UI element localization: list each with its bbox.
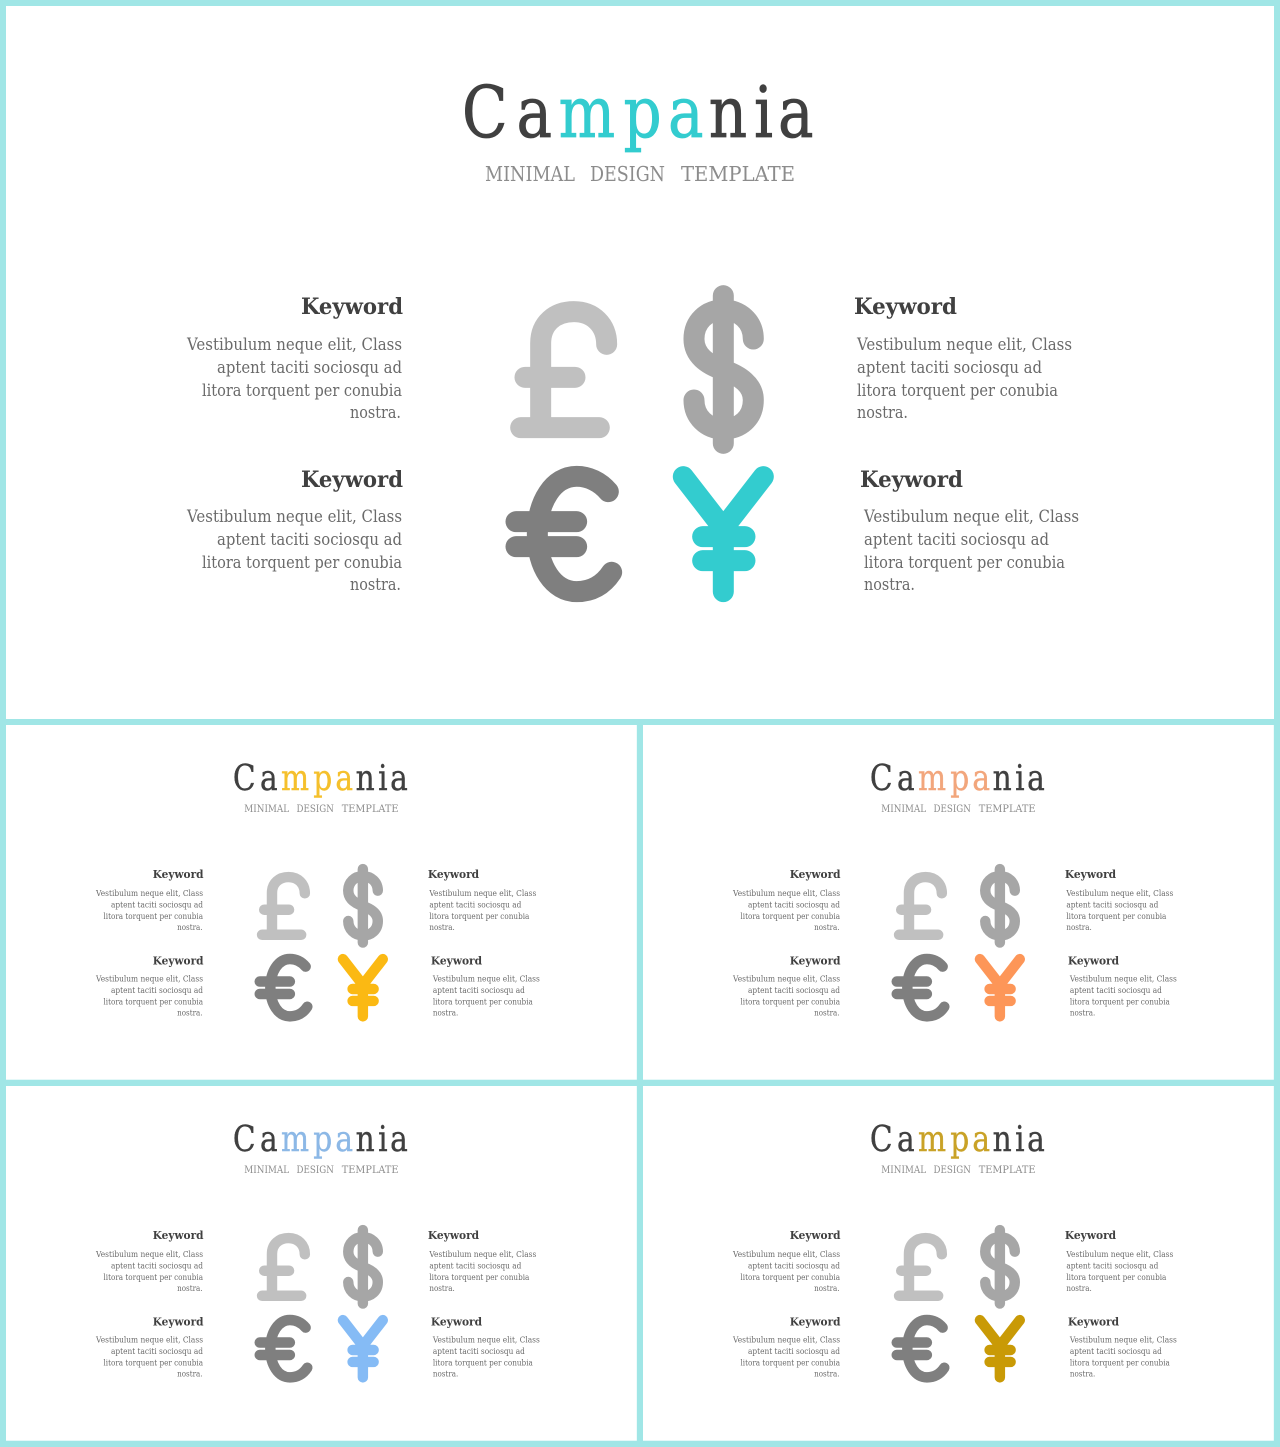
icon: dollar	[348, 869, 378, 943]
subtitle	[485, 162, 795, 186]
text block: top right: Keyword	[428, 1229, 479, 1242]
icon: dollar	[985, 869, 1015, 943]
text block: bottom left: Keyword	[153, 1315, 204, 1328]
title: mpa	[559, 72, 704, 154]
text block: top right: nostra.	[1066, 922, 1092, 932]
text block: top right: nostra.	[429, 1283, 455, 1293]
text block: top right	[1065, 1229, 1173, 1293]
text block: bottom right: nostra.	[864, 575, 915, 595]
text block: bottom right: nostra.	[433, 1008, 458, 1018]
icon: euro	[897, 959, 944, 1016]
text block: top right: Vestibulum neque elit, Class	[428, 888, 536, 898]
text block: top right: Keyword	[428, 868, 479, 881]
text block: bottom left	[186, 467, 403, 595]
text block: top right	[428, 868, 536, 932]
subtitle	[244, 1165, 399, 1176]
subtitle: TEMPLATE	[979, 804, 1036, 815]
text block: bottom right: Keyword	[431, 1315, 482, 1328]
text block: top right: aptent taciti sociosqu ad	[429, 1261, 522, 1271]
text block: bottom right	[860, 467, 1079, 595]
text block: bottom left: litora torquent per conubia	[104, 997, 203, 1007]
text block: bottom left: nostra.	[350, 575, 401, 595]
text block: bottom left: nostra.	[814, 1008, 840, 1018]
title: mpa	[281, 758, 353, 799]
subtitle	[244, 804, 399, 815]
title: nia	[993, 758, 1045, 799]
text block: top left	[186, 294, 403, 423]
icon: yen	[980, 1320, 1020, 1377]
icon: dollar	[694, 296, 753, 443]
text block: bottom right	[431, 1315, 540, 1379]
subtitle: DESIGN	[297, 1165, 334, 1176]
subtitle: MINIMAL	[881, 804, 926, 815]
text block: bottom left: litora torquent per conubia	[202, 553, 402, 573]
text block: bottom left	[732, 1315, 841, 1379]
text block: top left: aptent taciti sociosqu ad	[217, 358, 402, 378]
text block: bottom right: aptent taciti sociosqu ad	[1070, 985, 1162, 995]
panel: yellow variant slide	[6, 725, 637, 1080]
title	[233, 758, 408, 799]
text block: bottom right: Vestibulum neque elit, Class	[1069, 974, 1177, 984]
title: Ca	[462, 72, 552, 154]
icon: pound	[262, 877, 305, 935]
text block: top right: nostra.	[1066, 1283, 1092, 1293]
text block: bottom right: Vestibulum neque elit, Class	[1069, 1335, 1177, 1345]
text block: top right: Vestibulum neque elit, Class	[1065, 888, 1173, 898]
text block: top right: litora torquent per conubia	[1066, 911, 1166, 921]
title: Ca	[870, 1119, 915, 1160]
text block: top left: nostra.	[814, 922, 840, 932]
text block: bottom right: litora torquent per conubia	[433, 997, 533, 1007]
title: mpa	[918, 758, 990, 799]
text block: bottom right: nostra.	[1070, 1008, 1095, 1018]
panel: main slide	[6, 6, 1274, 719]
title	[233, 1119, 408, 1160]
text block: bottom right	[431, 954, 540, 1018]
text block: top left: nostra.	[350, 403, 401, 423]
text block: bottom left: Keyword	[790, 1315, 841, 1328]
text block: top left: litora torquent per conubia	[741, 911, 840, 921]
text block: bottom left: Keyword	[153, 954, 204, 967]
title	[870, 1119, 1045, 1160]
text block: bottom left: nostra.	[177, 1369, 203, 1379]
text block: top left	[95, 868, 204, 932]
icon: yen	[343, 1320, 383, 1377]
icon: yen	[343, 959, 383, 1016]
subtitle: DESIGN	[934, 1165, 971, 1176]
icon: euro	[260, 1320, 307, 1377]
text block: top left: Keyword	[153, 1229, 204, 1242]
text block: top right: litora torquent per conubia	[429, 911, 529, 921]
text block: top left: Vestibulum neque elit, Class	[186, 335, 402, 355]
text block: top right: aptent taciti sociosqu ad	[857, 358, 1042, 378]
text block: bottom right: litora torquent per conubia	[1070, 1358, 1170, 1368]
text block: bottom left: litora torquent per conubia	[741, 997, 840, 1007]
text block: bottom left: Vestibulum neque elit, Class	[732, 974, 840, 984]
subtitle	[881, 1165, 1036, 1176]
text block: top right: nostra.	[429, 922, 455, 932]
text block: top left: aptent taciti sociosqu ad	[111, 1261, 204, 1271]
text block: bottom left: Vestibulum neque elit, Class	[186, 507, 402, 527]
title: nia	[356, 758, 408, 799]
text block: bottom right: nostra.	[433, 1369, 458, 1379]
text block: top left: Keyword	[153, 868, 204, 881]
text block: top left: Vestibulum neque elit, Class	[732, 1249, 840, 1259]
subtitle: TEMPLATE	[342, 1165, 399, 1176]
text block: top right: litora torquent per conubia	[857, 381, 1058, 401]
subtitle	[881, 804, 1036, 815]
text block: top left: litora torquent per conubia	[104, 911, 203, 921]
subtitle: TEMPLATE	[681, 162, 795, 186]
text block: top left: aptent taciti sociosqu ad	[748, 900, 841, 910]
text block: bottom right: litora torquent per conubia	[864, 553, 1065, 573]
text block: top left: litora torquent per conubia	[104, 1272, 203, 1282]
title	[870, 758, 1045, 799]
text block: top right: Keyword	[1065, 1229, 1116, 1242]
text block: top left: Vestibulum neque elit, Class	[95, 1249, 203, 1259]
text block: bottom right: Keyword	[431, 954, 482, 967]
icon: euro	[516, 476, 612, 592]
text block: top left	[732, 1229, 841, 1293]
text block: bottom left	[732, 954, 841, 1018]
title: nia	[709, 72, 814, 154]
icon: pound	[899, 1238, 942, 1296]
text block: top left: Keyword	[301, 294, 403, 320]
text block: top left	[732, 868, 841, 932]
text block: bottom right: Vestibulum neque elit, Class	[432, 974, 540, 984]
panel: gold variant slide	[643, 1086, 1274, 1441]
text block: bottom left: aptent taciti sociosqu ad	[748, 1346, 841, 1356]
text block: bottom left: Keyword	[301, 467, 403, 493]
subtitle: MINIMAL	[485, 162, 575, 186]
text block: bottom right: Keyword	[1068, 1315, 1119, 1328]
icon: dollar	[985, 1230, 1015, 1304]
text block: bottom left	[95, 1315, 204, 1379]
icon: yen	[683, 477, 763, 592]
icon: pound	[521, 312, 607, 428]
text block: bottom right	[1068, 954, 1177, 1018]
text block: bottom right: Keyword	[1068, 954, 1119, 967]
icon: pound	[262, 1238, 305, 1296]
text block: bottom right: aptent taciti sociosqu ad	[1070, 1346, 1162, 1356]
text block: bottom left: litora torquent per conubia	[104, 1358, 203, 1368]
text block: bottom left: aptent taciti sociosqu ad	[748, 985, 841, 995]
icon: euro	[897, 1320, 944, 1377]
text block: top left	[95, 1229, 204, 1293]
subtitle: MINIMAL	[244, 804, 289, 815]
text block: top right: litora torquent per conubia	[1066, 1272, 1166, 1282]
text block: top left: Vestibulum neque elit, Class	[732, 888, 840, 898]
text block: bottom right: nostra.	[1070, 1369, 1095, 1379]
title: nia	[993, 1119, 1045, 1160]
text block: bottom right: aptent taciti sociosqu ad	[433, 985, 525, 995]
text block: bottom left: aptent taciti sociosqu ad	[111, 985, 204, 995]
title	[462, 72, 814, 154]
text block: top left: nostra.	[177, 922, 203, 932]
text block: bottom left: aptent taciti sociosqu ad	[217, 530, 402, 550]
text block: top left: nostra.	[177, 1283, 203, 1293]
text block: top right: aptent taciti sociosqu ad	[1066, 900, 1159, 910]
subtitle: DESIGN	[934, 804, 971, 815]
text block: top right	[854, 294, 1072, 423]
text block: top left: litora torquent per conubia	[202, 381, 402, 401]
text block: bottom left: nostra.	[177, 1008, 203, 1018]
panel: orange variant slide	[643, 725, 1274, 1080]
text block: bottom right: Vestibulum neque elit, Class	[432, 1335, 540, 1345]
text block: top right: Keyword	[1065, 868, 1116, 881]
title: mpa	[281, 1119, 353, 1160]
title: Ca	[233, 758, 278, 799]
subtitle: DESIGN	[590, 162, 665, 186]
subtitle: MINIMAL	[244, 1165, 289, 1176]
text block: top right: aptent taciti sociosqu ad	[429, 900, 522, 910]
title: mpa	[918, 1119, 990, 1160]
text block: top right: Keyword	[854, 294, 957, 320]
text block: top left: aptent taciti sociosqu ad	[111, 900, 204, 910]
text block: bottom left	[95, 954, 204, 1018]
text block: top left: Keyword	[790, 868, 841, 881]
text block: top left: Vestibulum neque elit, Class	[95, 888, 203, 898]
text block: bottom left: Keyword	[790, 954, 841, 967]
icon: pound	[899, 877, 942, 935]
subtitle: MINIMAL	[881, 1165, 926, 1176]
subtitle: TEMPLATE	[342, 804, 399, 815]
text block: bottom right: Keyword	[860, 467, 963, 493]
text block: bottom left: Vestibulum neque elit, Class	[95, 1335, 203, 1345]
text block: top right	[428, 1229, 536, 1293]
text block: top right: nostra.	[857, 403, 908, 423]
text block: bottom left: Vestibulum neque elit, Class	[732, 1335, 840, 1345]
text block: bottom right: litora torquent per conubia	[433, 1358, 533, 1368]
text block: bottom left: aptent taciti sociosqu ad	[111, 1346, 204, 1356]
text block: bottom right: litora torquent per conubia	[1070, 997, 1170, 1007]
title: Ca	[870, 758, 915, 799]
text block: top right: Vestibulum neque elit, Class	[428, 1249, 536, 1259]
text block: top right: litora torquent per conubia	[429, 1272, 529, 1282]
title: nia	[356, 1119, 408, 1160]
text block: top left: Keyword	[790, 1229, 841, 1242]
text block: bottom left: Vestibulum neque elit, Class	[95, 974, 203, 984]
text block: top left: litora torquent per conubia	[741, 1272, 840, 1282]
text block: bottom right: aptent taciti sociosqu ad	[433, 1346, 525, 1356]
text block: top left: nostra.	[814, 1283, 840, 1293]
text block: bottom right: aptent taciti sociosqu ad	[864, 530, 1049, 550]
icon: dollar	[348, 1230, 378, 1304]
subtitle: TEMPLATE	[979, 1165, 1036, 1176]
icon: euro	[260, 959, 307, 1016]
icon: yen	[980, 959, 1020, 1016]
text block: bottom left: nostra.	[814, 1369, 840, 1379]
text block: bottom right: Vestibulum neque elit, Class	[863, 507, 1079, 527]
panel: blue variant slide	[6, 1086, 637, 1441]
text block: top right: aptent taciti sociosqu ad	[1066, 1261, 1159, 1271]
text block: top right: Vestibulum neque elit, Class	[856, 335, 1072, 355]
subtitle: DESIGN	[297, 804, 334, 815]
text block: bottom left: litora torquent per conubia	[741, 1358, 840, 1368]
text block: top left: aptent taciti sociosqu ad	[748, 1261, 841, 1271]
text block: top right: Vestibulum neque elit, Class	[1065, 1249, 1173, 1259]
text block: bottom right	[1068, 1315, 1177, 1379]
text block: top right	[1065, 868, 1173, 932]
title: Ca	[233, 1119, 278, 1160]
